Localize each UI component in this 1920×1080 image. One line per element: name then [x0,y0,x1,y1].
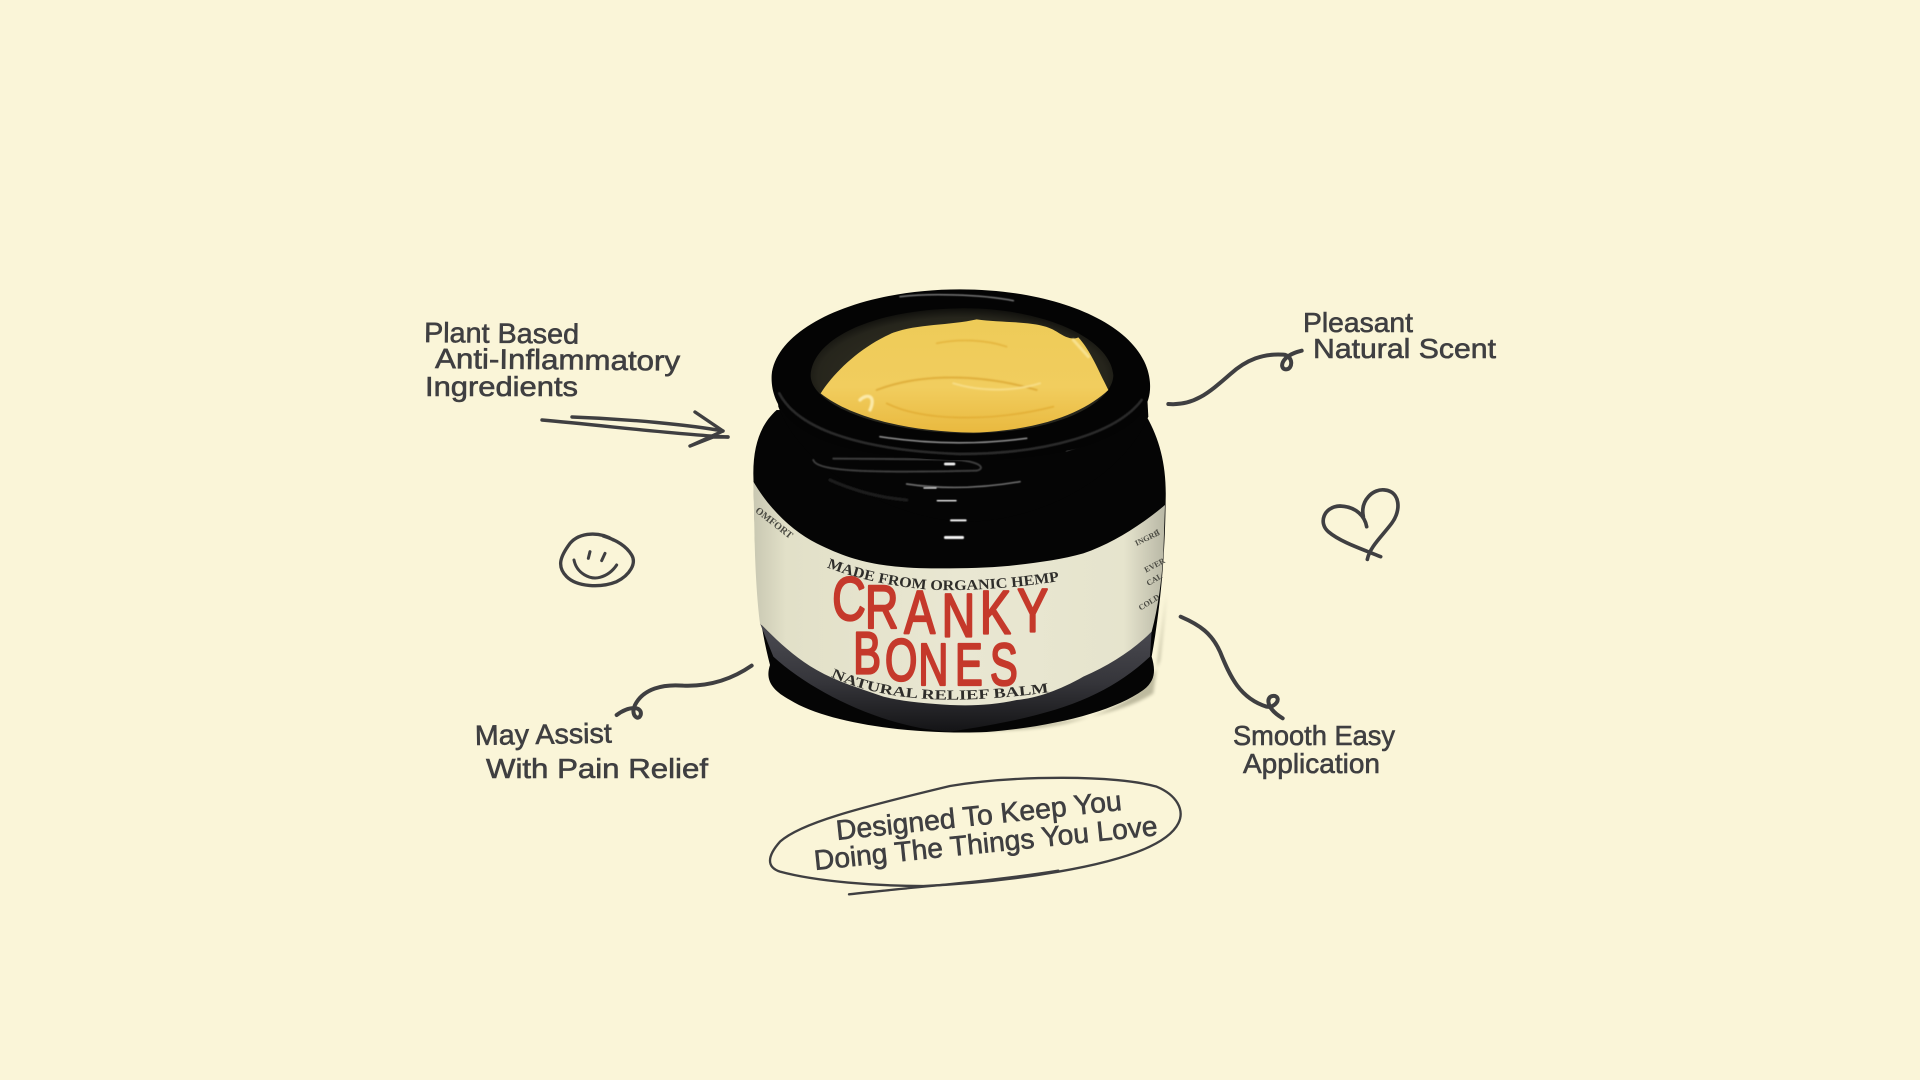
lid rim [772,289,1150,460]
callout: may assist with pain relief [475,666,752,784]
arrow: to jar [542,412,728,446]
label text: right side: EVER [1143,556,1167,574]
callout text: Ingredients [425,371,578,402]
hand-drawn oval [770,778,1181,894]
jar neck [777,383,1148,522]
label text: natural relief balm: NATURAL RELIEF BALM [831,668,1048,700]
callout text: Plant Based [424,317,579,350]
callout text: Smooth Easy [1233,720,1395,751]
brand name: cranky: CRANKY [832,565,1048,650]
label text: made from organic hemp: MADE FROM ORGANIC HEMP [826,558,1058,590]
callout text [424,317,680,402]
callout: smooth easy application [1181,617,1395,779]
product label [753,482,1167,706]
curved pointer [1181,617,1283,718]
icon: heart [1323,490,1398,559]
label text: right side: INGRE [1134,528,1161,548]
brand name: bones: BONES [853,620,1018,698]
label text: right side: I [1154,527,1161,537]
balm texture [860,340,1088,418]
callout text: Application [1243,748,1380,779]
base reflection band [760,623,1152,732]
callout text [1303,307,1496,364]
neck thread highlights [813,407,1137,500]
callout text: Pleasant [1303,307,1413,338]
callout text [475,718,708,784]
label text: right side: COLD [1137,592,1161,612]
label text: right side [1134,527,1167,612]
label text: right side: CAL [1145,572,1164,588]
callout text: Anti-Inflammatory [435,343,680,377]
callout text: With Pain Relief [486,753,708,784]
jar body [753,410,1166,733]
icon: smiley face [561,534,633,586]
callout text: May Assist [475,718,612,751]
rim edge highlights [779,295,1142,454]
jar shadow [783,593,1167,731]
tagline in hand-drawn oval [770,778,1181,894]
glass highlights [923,463,967,539]
callout text: Natural Scent [1313,333,1496,364]
label text: left side: OMFORT [753,505,795,542]
yellow balm [821,319,1108,433]
product photo: balm jar [753,289,1167,733]
callout text [1233,720,1395,779]
callout: pleasant natural scent [1168,307,1496,404]
callout: plant based anti-inflammatory ingredients [424,317,728,446]
jar opening [811,308,1113,433]
curved pointer [1168,351,1302,404]
tagline text: Designed To Keep You [834,785,1123,846]
tagline text: Doing The Things You Love [812,810,1159,876]
curved pointer [617,666,752,718]
